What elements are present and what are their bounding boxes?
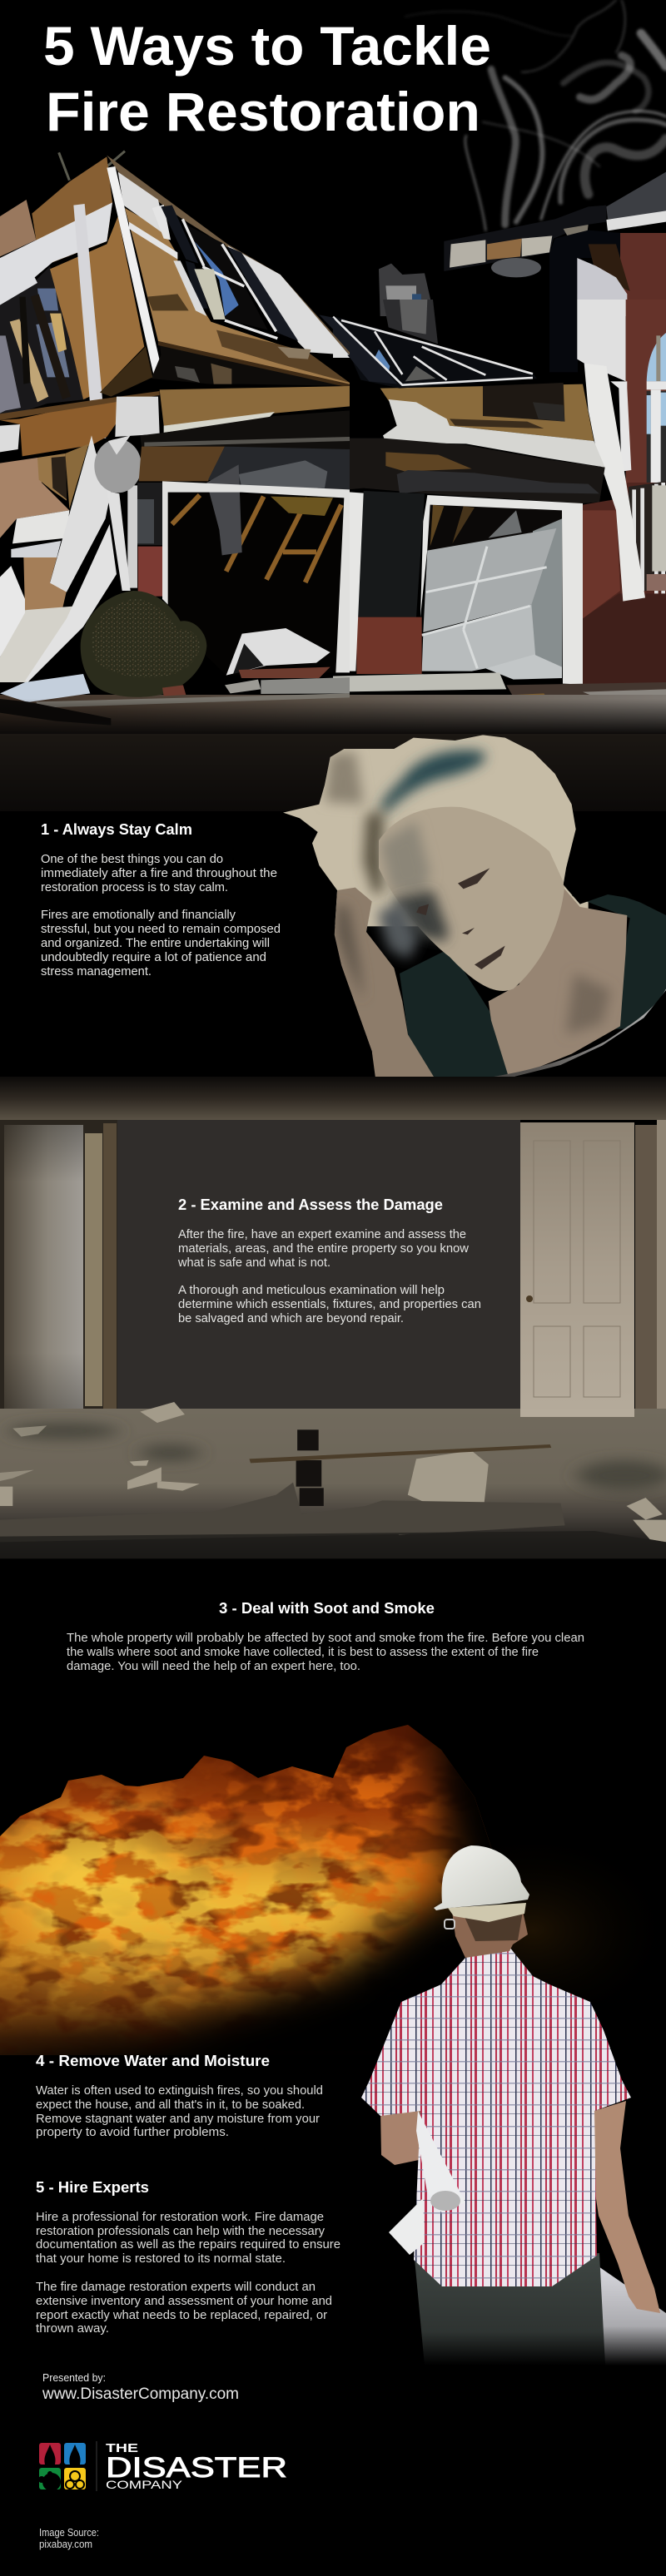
white siding: [577, 300, 626, 381]
orange texture: [5, 1740, 445, 2004]
gable OSB lower: [50, 216, 144, 399]
text: section 2: After the fire, have an expert examine and assess the: [178, 1227, 466, 1241]
text: section 3: damage. You will need the help of an expert here, too.: [67, 1659, 360, 1673]
icon: mold: [38, 2468, 61, 2491]
chimney: [379, 264, 435, 316]
shaded forehead: [380, 821, 430, 893]
brick lower: [583, 483, 666, 685]
presented by: Presented by:: [42, 2371, 106, 2384]
panel: section 1 top band: [0, 734, 666, 811]
text: section 2: materials, areas, and the entire property so you know: [178, 1241, 469, 1256]
bush: [81, 591, 206, 697]
teal shadow in hair: [381, 751, 485, 815]
logo wordmark: THE: [106, 2441, 138, 2455]
text: section 3: [67, 1600, 584, 1673]
right door over floor edge: [520, 1409, 634, 1417]
walkway: [36, 693, 350, 708]
siding: [577, 258, 627, 316]
title: [43, 15, 491, 142]
hair parting: [364, 810, 383, 896]
text: section 4: Remove stagnant water and any moisture from your: [36, 2112, 320, 2126]
brick pier: [356, 617, 422, 674]
poster behind hand: [599, 2266, 666, 2365]
shirt: [361, 1947, 631, 2286]
roof siding: [118, 172, 349, 355]
panel: damaged room: [0, 1077, 666, 1558]
text: section 4: 4 - Remove Water and Moisture: [36, 2053, 270, 2069]
large white board: [50, 435, 111, 592]
tarp: [397, 470, 599, 493]
hard hat: [434, 1845, 529, 1910]
text: section 5: Hire a professional for restoration work. Fire damage: [36, 2210, 324, 2224]
right side fade: [405, 1729, 500, 1910]
neck and chest: [489, 888, 627, 1079]
fallen carpet: [0, 1483, 565, 1542]
neck and head: [452, 1911, 528, 1958]
text: section 2: determine which essentials, fixtures, and properties can: [178, 1297, 481, 1311]
flame body: [0, 1725, 500, 2055]
posts: [127, 485, 137, 588]
text: section 3: 3 - Deal with Soot and Smoke: [219, 1600, 435, 1617]
collar shadow: [566, 973, 610, 1034]
text: section 5: extensive inventory and assessment of your home and: [36, 2294, 332, 2308]
title: 5 Ways to Tackle: [43, 15, 491, 77]
mid brown panel: [160, 386, 350, 426]
logo: The Disaster Company: [38, 2441, 287, 2491]
text: section 3: the walls where soot and smoke have collected, it is best to assess the extent of the fire: [67, 1645, 539, 1659]
icon: biohazard: [64, 2468, 86, 2489]
icon: water: [64, 2443, 86, 2465]
text: section 4: [36, 2053, 323, 2139]
satellite dish: [94, 435, 142, 493]
page curl: [495, 988, 666, 1077]
dark column: [549, 230, 620, 316]
photo: man in hard hat seen from behind: [361, 1845, 666, 2365]
burnt wood strip: [385, 452, 472, 472]
presented by: www.DisasterCompany.com: [42, 2385, 239, 2403]
text: section 2: [177, 1196, 481, 1325]
text: section 5: 5 - Hire Experts: [36, 2179, 149, 2196]
photo: fire-damaged house: [0, 151, 666, 734]
text: section 2: what is safe and what is not.: [177, 1256, 331, 1270]
left arm: [380, 2105, 420, 2165]
photo: wall of flame: [0, 1725, 599, 2055]
fascia: [107, 166, 162, 377]
dark red texture: [0, 1726, 466, 2031]
text: section 2: 2 - Examine and Assess the Damage: [178, 1196, 443, 1213]
small siding: [115, 397, 160, 437]
slabs: [0, 674, 90, 702]
floor holes: [296, 1429, 324, 1506]
shadow on OSB: [147, 294, 189, 310]
text: section 1: [41, 821, 281, 978]
porch railing: [629, 481, 666, 593]
upper brick: [620, 233, 666, 316]
slate roof: [606, 172, 666, 219]
eyes, nose and lips: [416, 868, 505, 969]
image source credit: [39, 2526, 99, 2550]
ceiling: [0, 1077, 666, 1120]
flame glow: [391, 1830, 666, 2030]
window hole: [0, 266, 86, 418]
gable OSB upper: [32, 156, 112, 264]
house: upper right roof, beam, column and chimney: [379, 172, 666, 316]
lower left wood band: [0, 399, 119, 456]
text: section 2: A thorough and meticulous examination will help: [178, 1283, 445, 1297]
left garage post: [333, 491, 364, 671]
image source credit: Image Source:: [39, 2526, 99, 2539]
smoke hole in flame: [85, 1752, 139, 1786]
ground slab and fade: [0, 695, 666, 733]
left white edge: [0, 566, 25, 657]
house: right side garage and brick: [333, 300, 666, 716]
charred edge of dormer: [216, 330, 350, 383]
trousers: [415, 2253, 605, 2365]
right garage interior and door: [422, 502, 564, 680]
white siding strip: [383, 399, 605, 468]
text: section 1: undoubtedly require a lot of patience and: [41, 950, 266, 964]
plaster wall: [0, 458, 69, 538]
lower flat paper: [389, 2198, 425, 2255]
text: section 4: expect the house, and all that's in it, to be soaked.: [36, 2098, 305, 2112]
text: section 2: be salvaged and which are beyond repair.: [178, 1311, 404, 1325]
arm shadow: [337, 904, 364, 1001]
small window: [37, 453, 67, 501]
torn long trim: [584, 364, 645, 602]
text: section 1: One of the best things you can do: [41, 852, 223, 866]
brown wall with burn: [380, 383, 594, 441]
left garage interior: [168, 464, 345, 676]
hair base: [283, 732, 589, 926]
floor debris: [0, 1402, 666, 1542]
dark dirt patches: [8, 1423, 666, 1491]
text: section 5: that your home is restored to its normal state.: [36, 2252, 286, 2266]
scorched brown: [139, 447, 225, 481]
text: section 5: restoration professionals can help with the necessary: [36, 2224, 325, 2238]
text: section 5: [36, 2179, 340, 2336]
icon: fire: [39, 2443, 61, 2465]
wood: [65, 443, 89, 509]
text: section 5: The fire damage restoration experts will conduct an: [36, 2280, 316, 2294]
far shutter: [319, 315, 350, 347]
floor: [0, 1409, 666, 1558]
gable underside: [100, 347, 152, 397]
white band: [0, 202, 112, 305]
left wall and door: [0, 1120, 118, 1409]
section 1 image: worried woman: [283, 732, 666, 1087]
text: section 4: Water is often used to extinguish fires, so you should: [36, 2083, 323, 2098]
long diagonal board: [25, 524, 117, 682]
dormer OSB: [125, 208, 350, 387]
white fascia: [606, 211, 666, 230]
logo wordmark: DISASTER: [106, 2452, 287, 2484]
hair at back of head: [462, 1911, 523, 1941]
text: section 1: 1 - Always Stay Calm: [41, 821, 192, 838]
arch window: [647, 333, 666, 483]
concrete slab: [333, 672, 506, 692]
bottom fade: [0, 1864, 500, 2055]
dark column: [549, 300, 578, 372]
text: section 5: report exactly what needs to be replaced, repaired, or: [36, 2308, 327, 2322]
text: section 3: The whole property will probably be affected by soot and smoke from the fire. Before you clean: [67, 1631, 584, 1645]
text: section 1: immediately after a fire and throughout the: [41, 866, 277, 880]
right door frame: [635, 1120, 666, 1416]
right arm and hand: [589, 2101, 660, 2313]
dark wall: [117, 1120, 520, 1409]
presented by: [42, 2371, 239, 2403]
face: [379, 807, 564, 991]
house: upper left gable and dormer: [0, 151, 350, 456]
column: [137, 483, 162, 545]
garage frame: [162, 481, 350, 672]
scorched wood: [589, 244, 630, 291]
trim boards: [129, 222, 177, 260]
white boards: [12, 510, 69, 543]
text: section 1: stressful, but you need to remain composed: [41, 922, 281, 936]
lower siding: [0, 605, 94, 682]
glasses: [445, 1920, 455, 1929]
rubble and box: [506, 682, 666, 716]
text: section 5: thrown away.: [36, 2321, 109, 2336]
arm: [335, 888, 439, 1084]
shadowed hair left: [325, 751, 364, 805]
charred debris: [0, 699, 111, 726]
text: section 4: property to avoid further problems.: [36, 2125, 229, 2139]
ridge burn: [107, 156, 350, 355]
image source credit: pixabay.com: [39, 2538, 92, 2550]
chimney base: [383, 300, 438, 344]
dark eave: [333, 438, 605, 503]
right door: [520, 1122, 634, 1417]
downpipe: [73, 204, 106, 439]
illustration: smoke rising over the house: [405, 0, 666, 230]
text: section 1: Fires are emotionally and financially: [41, 908, 236, 922]
antenna sticks: [59, 151, 125, 185]
ground fade: [0, 699, 666, 734]
rolled paper: [416, 2111, 465, 2212]
hand shade under face: [377, 901, 419, 959]
floor details: [0, 1402, 666, 1558]
window trim at right: [610, 381, 631, 472]
dark fascia: [140, 410, 350, 452]
text: section 1: stress management.: [41, 964, 152, 978]
yellow texture: [0, 1775, 413, 2022]
house: lower left: [0, 410, 350, 726]
black wall wrap: [358, 491, 425, 617]
wooden plank: [249, 1444, 551, 1463]
lower roof windows: [333, 316, 537, 389]
dark half of face: [393, 890, 448, 942]
text: section 1: and organized. The entire undertaking will: [41, 936, 270, 950]
white piece: [0, 424, 20, 452]
shirt: [400, 892, 666, 1087]
text: section 1: restoration process is to stay calm.: [41, 880, 228, 894]
dormer window: [161, 206, 298, 341]
lower OSB: [23, 557, 67, 610]
pink plaster corner: [0, 200, 36, 256]
gray wrap: [208, 447, 350, 489]
debris: fallen white section: [226, 628, 331, 678]
burnt beam: [444, 206, 606, 277]
logo wordmark: COMPANY: [106, 2478, 183, 2491]
logo wordmark: [106, 2441, 287, 2491]
text: section 5: documentation as well as the repairs required to ensure: [36, 2237, 340, 2252]
roof underside: [152, 341, 350, 388]
right garage frame: [420, 495, 583, 685]
brick: [138, 547, 168, 597]
hat strap: [448, 1903, 526, 1922]
title: Fire Restoration: [46, 81, 480, 142]
brick upper: [626, 300, 666, 485]
